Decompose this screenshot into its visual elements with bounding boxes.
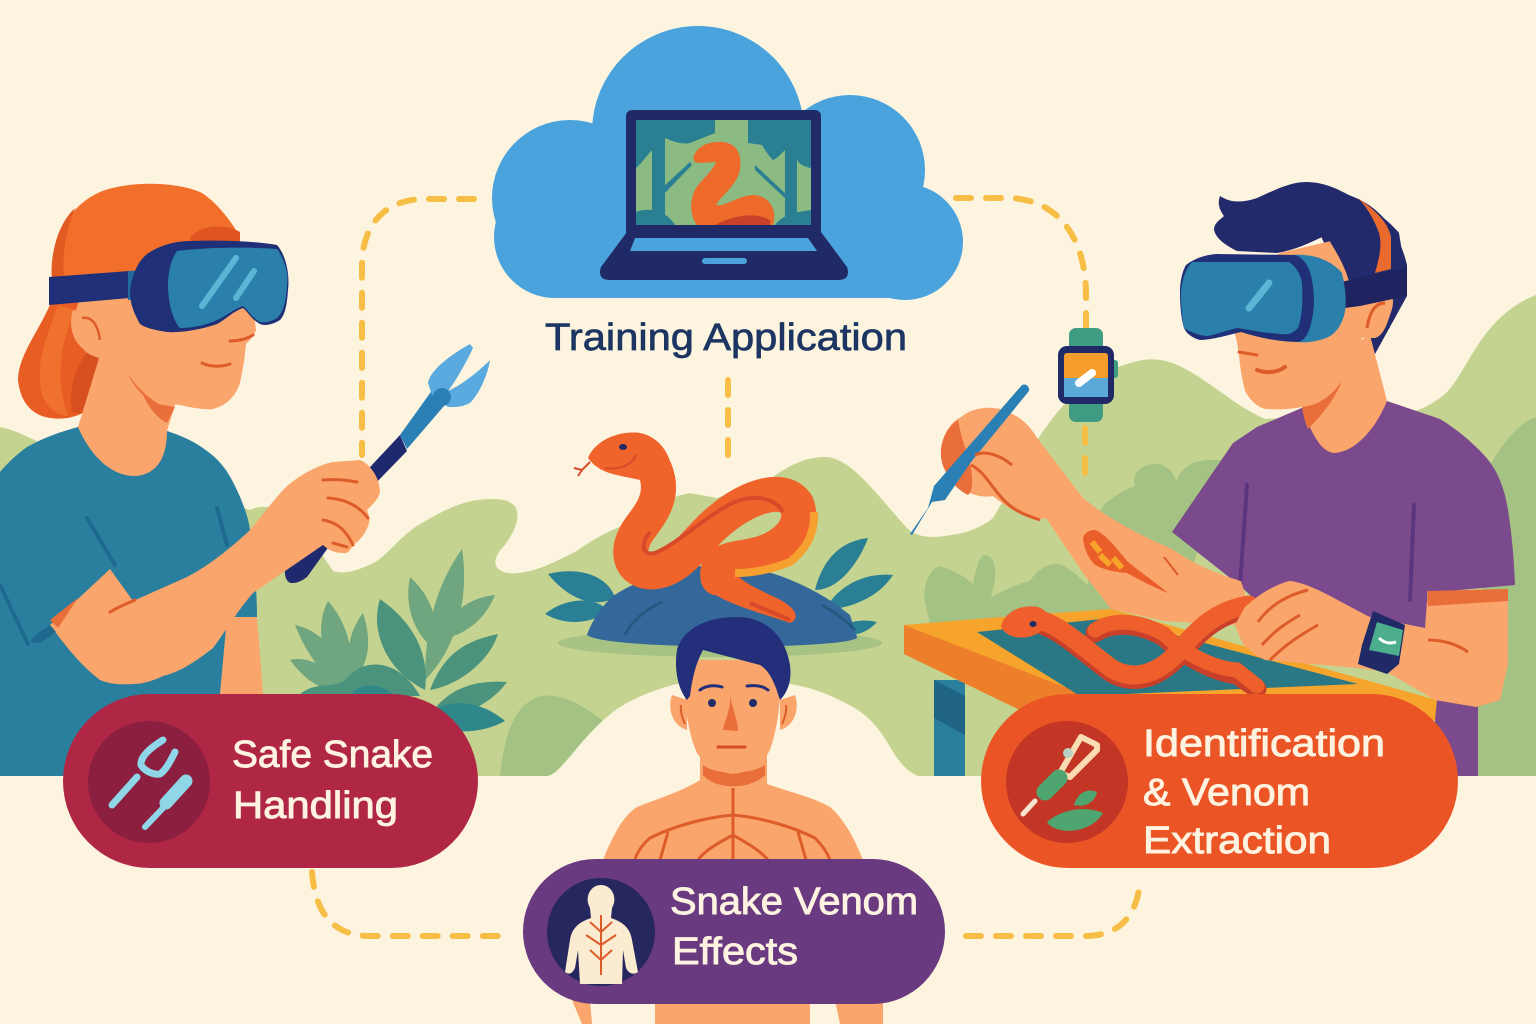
sleeve fold lines — [0, 508, 227, 644]
pill: identification and venom extraction: & Venom — [1143, 772, 1310, 814]
icon: extraction tool — [1023, 737, 1103, 831]
lower shirt — [1435, 690, 1478, 776]
icon: tongs — [112, 740, 186, 827]
head — [684, 660, 781, 774]
center person — [572, 617, 883, 1024]
face — [73, 280, 256, 409]
dashed connectors — [312, 198, 1140, 936]
far arm — [220, 617, 263, 694]
shoulders and torso — [603, 740, 863, 860]
strap — [1328, 267, 1407, 310]
headset front — [1180, 254, 1314, 342]
headset side — [1290, 255, 1346, 342]
face — [1235, 240, 1375, 409]
pill: snake venom effects: Snake Venom — [670, 881, 918, 923]
pill: snake venom effects: Effects — [672, 931, 798, 973]
sleeve shadow — [30, 625, 56, 643]
neck — [1302, 335, 1387, 453]
snake on rock scene — [545, 432, 893, 657]
laptop base — [600, 232, 848, 280]
table snake — [1001, 605, 1257, 689]
snake tool — [285, 344, 490, 583]
ears — [670, 695, 797, 730]
snake head — [588, 432, 673, 480]
right arm and hand — [1235, 581, 1508, 707]
cloud — [492, 26, 963, 300]
laptop snake — [691, 142, 774, 225]
veins — [635, 788, 830, 860]
left plants — [290, 549, 507, 731]
background hills — [0, 295, 1536, 776]
hair back — [1300, 189, 1407, 354]
leaves — [548, 571, 615, 602]
arm and hand — [50, 460, 380, 684]
pill: identification and venom extraction: Identification — [1143, 723, 1385, 765]
forearm — [941, 408, 1247, 625]
table leg — [934, 680, 965, 776]
hair — [676, 617, 791, 700]
pill: safe snake handling: Handling — [233, 785, 398, 827]
bush behind right arm — [1088, 460, 1225, 610]
fingers shadow — [941, 420, 972, 495]
neck — [78, 355, 178, 476]
floating watch — [1058, 328, 1118, 422]
table — [904, 609, 1437, 720]
cream arch — [548, 684, 918, 776]
snake body — [631, 470, 799, 578]
pill: identification and venom extraction — [981, 694, 1458, 868]
pill: identification and venom extraction: Extraction — [1143, 820, 1331, 862]
bottom left plant — [0, 700, 63, 776]
pill: safe snake handling: Safe Snake — [232, 734, 433, 776]
icon: body with veins — [565, 885, 638, 984]
laptop — [600, 110, 848, 280]
hair back — [18, 295, 100, 419]
left person — [0, 184, 490, 776]
wristwatch — [1358, 611, 1405, 674]
rock — [587, 565, 857, 647]
sleeve band — [1427, 589, 1508, 606]
pill: safe snake handling — [63, 694, 478, 868]
shirt — [0, 427, 257, 776]
left lower mound — [500, 695, 615, 776]
chin shadow — [703, 765, 765, 786]
title: Training Application — [545, 317, 907, 359]
venom bite — [1083, 530, 1168, 593]
front hair — [1214, 182, 1405, 285]
laptop screen — [636, 120, 811, 225]
bush by table — [924, 555, 1103, 625]
pill: snake venom effects — [523, 859, 945, 1004]
rock shadow — [558, 629, 882, 657]
right dark hill — [1470, 417, 1536, 776]
headset — [49, 271, 130, 305]
right person — [904, 182, 1515, 776]
shirt — [1172, 401, 1515, 640]
scalpel pen — [910, 384, 1029, 535]
hair cap — [52, 184, 240, 280]
eyes and mouth — [708, 699, 716, 707]
